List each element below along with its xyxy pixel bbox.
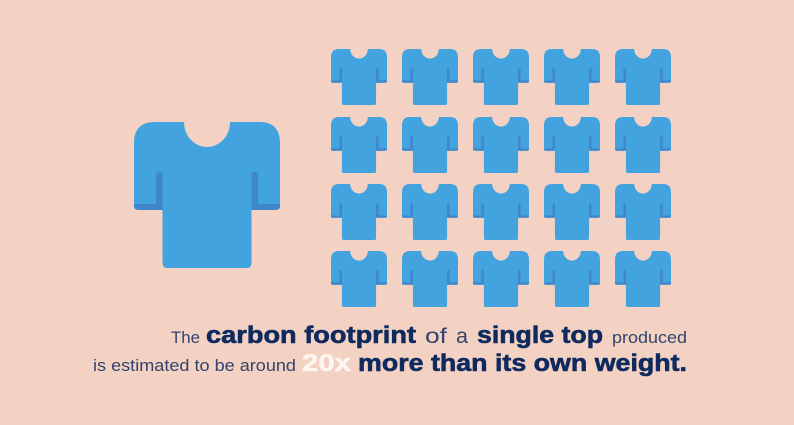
caption line one: carbon footprint — [206, 322, 416, 349]
grid of twenty small t-shirts — [331, 49, 671, 307]
caption line one — [171, 322, 687, 349]
caption line one: single top — [477, 322, 603, 349]
caption line two: more than its own weight. — [358, 350, 687, 377]
caption line one: produced — [612, 328, 687, 347]
icon: large t-shirt — [134, 122, 280, 268]
caption line one: The — [171, 328, 200, 347]
caption text — [93, 322, 687, 377]
caption line two: is estimated to be around — [93, 356, 296, 375]
caption line one: a — [456, 325, 468, 348]
caption line one: of — [425, 325, 447, 348]
caption line two: 20x — [302, 350, 352, 377]
caption line two — [93, 350, 687, 377]
